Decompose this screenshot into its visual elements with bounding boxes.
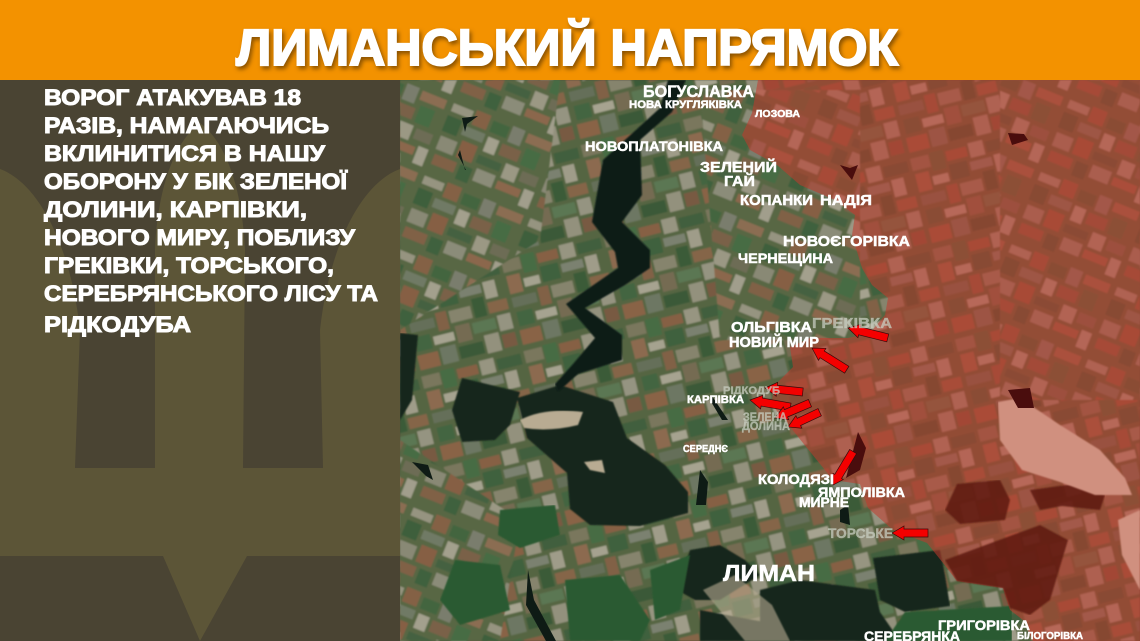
label: Богуславка: БОГУСЛАВКА bbox=[643, 83, 754, 101]
label: Зелений: ЗЕЛЕНИЙ bbox=[700, 158, 777, 176]
body text: ОБОРОНУ У БІК ЗЕЛЕНОЇ bbox=[44, 169, 348, 194]
dark forests bbox=[400, 333, 950, 641]
label: Лиман: ЛИМАН bbox=[723, 560, 815, 586]
label: Середнє: СЕРЕДНЄ bbox=[683, 443, 728, 455]
arrow: Ямполівка bbox=[828, 448, 858, 488]
label: Надія: НАДІЯ bbox=[820, 193, 872, 209]
arrow: Рідкодуб bbox=[764, 381, 804, 399]
occupied chalk quarry bbox=[998, 398, 1140, 590]
sand quarries bbox=[520, 411, 790, 641]
muted tone over farmland bbox=[400, 80, 1140, 641]
occupied ponds bbox=[840, 133, 1034, 478]
body text: РІДКОДУБА bbox=[44, 312, 191, 337]
occupied zone bbox=[742, 80, 1140, 641]
label: Зелена: ЗЕЛЕНА bbox=[743, 412, 787, 424]
arrows bbox=[749, 321, 928, 540]
occupied dark forest bbox=[945, 480, 1105, 615]
label: Гай: ГАЙ bbox=[724, 172, 755, 190]
label: Нова Кругляківка: НОВА КРУГЛЯКІВКА bbox=[629, 99, 742, 111]
header bar bbox=[0, 0, 1140, 80]
body text bbox=[44, 85, 378, 337]
label: Новоплатонівка: НОВОПЛАТОНІВКА bbox=[585, 138, 723, 154]
label: Новоєгорівка: НОВОЄГОРІВКА bbox=[783, 233, 910, 250]
body text: ГРЕКІВКИ, ТОРСЬКОГО, bbox=[44, 253, 334, 278]
small ponds bbox=[412, 116, 850, 641]
label: Лозова: ЛОЗОВА bbox=[755, 109, 800, 120]
arrow: Новий Мир bbox=[808, 342, 850, 376]
label: Мирне: МИРНЕ bbox=[799, 494, 849, 510]
title: ЛИМАНСЬКИЙ НАПРЯМОК bbox=[236, 18, 899, 76]
arrow: Торське bbox=[892, 526, 928, 540]
label: Греківка: ГРЕКІВКА bbox=[812, 315, 892, 332]
arrow: Греківка bbox=[846, 321, 889, 345]
label: Новий Мир: НОВИЙ МИР bbox=[729, 333, 819, 351]
label: Торське: ТОРСЬКЕ bbox=[828, 526, 893, 541]
body text: РАЗІВ, НАМАГАЮЧИСЬ bbox=[44, 113, 329, 138]
arrow: Зелена Долина south bbox=[785, 406, 823, 433]
body text: ВОРОГ АТАКУВАВ 18 bbox=[44, 85, 301, 110]
map bbox=[400, 80, 1140, 641]
body text: НОВОГО МИРУ, ПОБЛИЗУ bbox=[44, 225, 355, 250]
river and reservoir bbox=[555, 80, 686, 392]
map fields, second texture bbox=[400, 80, 1140, 641]
label: Чернещина: ЧЕРНЕЩИНА bbox=[738, 250, 833, 266]
label: Копанки: КОПАНКИ bbox=[740, 193, 813, 209]
arrow: Карпівка bbox=[749, 393, 792, 414]
map labels bbox=[585, 83, 1083, 641]
left panel bbox=[0, 80, 400, 641]
label: Рідкодуб: РІДКОДУБ bbox=[723, 385, 780, 397]
label: Карпівка: КАРПІВКА bbox=[687, 394, 744, 406]
label: Колодязі: КОЛОДЯЗІ bbox=[758, 471, 834, 487]
icon: trident watermark bbox=[0, 123, 400, 641]
green woodland bbox=[440, 505, 1012, 641]
body text: ДОЛИНИ, КАРПІВКИ, bbox=[44, 197, 307, 222]
label: Долина: ДОЛИНА bbox=[742, 421, 790, 433]
arrow: Зелена Долина north bbox=[772, 397, 813, 424]
label: Ольгівка: ОЛЬГІВКА bbox=[731, 319, 812, 336]
body text: СЕРЕБРЯНСЬКОГО ЛІСУ ТА bbox=[44, 281, 378, 306]
label: Ямполівка: ЯМПОЛІВКА bbox=[818, 484, 905, 500]
body text: ВКЛИНИТИСЯ В НАШУ bbox=[44, 141, 325, 166]
label: Григорівка: ГРИГОРІВКА bbox=[938, 617, 1030, 633]
